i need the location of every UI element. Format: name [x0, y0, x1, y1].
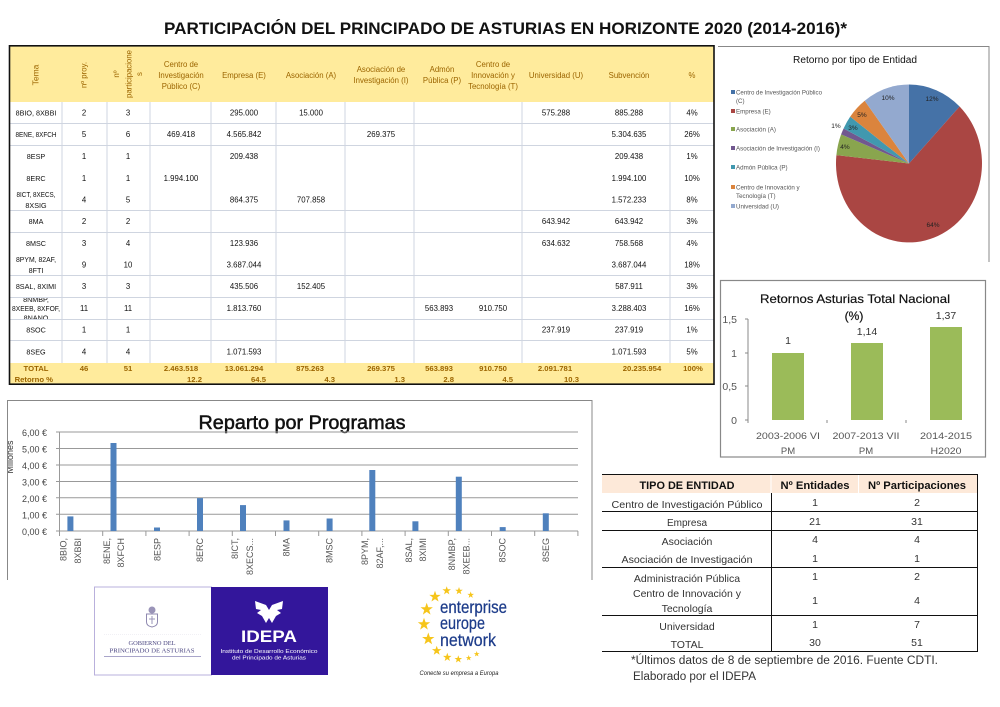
- table body rows: 1.071.593: [227, 348, 261, 356]
- table body rows: 8XEEB, 8XFOF,: [12, 304, 60, 313]
- table body rows: 8ESP: [27, 152, 45, 161]
- table header row: Tecnología (T): [468, 82, 518, 91]
- programme chart category labels: 8ERC: [195, 538, 205, 562]
- table header row: s: [135, 72, 144, 76]
- entity table rows: 1: [812, 619, 818, 631]
- table return percentage row: 1.3: [394, 375, 405, 384]
- table body rows: 1: [82, 326, 86, 334]
- table body rows: 11: [124, 304, 132, 313]
- logo: Gobierno del Principado de Asturias: [94, 587, 212, 675]
- programme chart axis labels: 4,00 €: [22, 461, 47, 471]
- table body rows: 10%: [684, 174, 700, 183]
- table body rows: 8SAL, 8XIMI: [16, 282, 56, 291]
- table body rows: 5: [126, 196, 131, 204]
- table body rows: 864.375: [230, 196, 259, 204]
- table body rows: 4: [126, 239, 131, 248]
- table header row: nº: [112, 70, 121, 78]
- table header row: Investigación: [158, 71, 204, 80]
- table body rows: 4.565.842: [227, 130, 261, 139]
- table header row: nº proy.: [80, 62, 88, 88]
- table total row: 2.091.781: [538, 364, 573, 373]
- entity table rows: Universidad: [659, 621, 715, 633]
- table header row: Innovación y: [471, 71, 515, 80]
- return chart categories: 2007-2013 VII: [832, 431, 900, 442]
- table header row: Centro de: [476, 60, 510, 69]
- table body rows: 1%: [686, 152, 698, 161]
- programme chart category labels: 8XEEB...: [462, 538, 472, 575]
- return chart axis labels: 0: [731, 415, 737, 427]
- programme chart category labels: 8XIMI: [418, 538, 428, 562]
- programme chart category labels: 8BIO,: [58, 538, 68, 561]
- return chart categories: 2014-2015: [920, 431, 972, 442]
- entity table rows: 1: [914, 553, 920, 565]
- table body rows: 8ICT, 8XECS,: [16, 190, 56, 199]
- pie chart legend: Asociación (A): [736, 126, 776, 134]
- table header row: Asociación (A): [286, 71, 337, 80]
- table body rows: 8BIO, 8XBBI: [16, 108, 56, 118]
- entity table rows: 31: [911, 516, 923, 528]
- return chart heading: (%): [845, 309, 863, 323]
- programme chart heading: Reparto por Programas: [198, 413, 406, 434]
- table body rows: 3: [126, 108, 130, 118]
- entity table rows: 1: [812, 571, 818, 583]
- government name: PRINCIPADO DE ASTURIAS: [110, 648, 195, 654]
- table return percentage row: 64.5: [251, 375, 267, 384]
- panel: distribution by programme bar chart: [5, 400, 592, 580]
- table body rows: 563.893: [425, 304, 453, 313]
- table total row: 100%: [683, 364, 703, 373]
- entity table rows: 21: [809, 516, 821, 528]
- table body rows: 3: [82, 282, 86, 291]
- table body rows: 8XSIG: [25, 201, 47, 210]
- panel: national return bar chart: [720, 280, 986, 457]
- pie chart percentage labels: 5%: [857, 112, 867, 119]
- panel: pie chart return by entity type: [718, 46, 989, 262]
- return chart heading: Retornos Asturias Total Nacional: [760, 292, 950, 306]
- table body rows: 123.936: [230, 239, 258, 248]
- return chart categories: PM: [859, 446, 873, 457]
- return chart categories: [756, 431, 972, 457]
- table body rows: 643.942: [542, 217, 570, 226]
- return chart values: [785, 310, 956, 347]
- table header row: Pública (P): [423, 76, 461, 85]
- table body rows: 269.375: [367, 130, 396, 139]
- pie chart legend: Asociación de Investigación (I): [736, 146, 820, 152]
- table body rows: 8SOC: [26, 326, 46, 334]
- logo: IDEPA: [211, 587, 328, 675]
- table body rows: 4: [82, 196, 87, 204]
- table body rows: 237.919: [615, 326, 643, 334]
- return chart categories: PM: [781, 446, 795, 457]
- table body rows: 3: [82, 239, 86, 248]
- government name: [110, 640, 195, 654]
- pie chart legend: Universidad (U): [736, 204, 779, 210]
- pie chart legend: Admón Pública (P): [736, 164, 788, 172]
- footnote: *Últimos datos de 8 de septiembre de 2016. Fuente CDTI.: [631, 654, 938, 667]
- return chart axis labels: 0,5: [722, 381, 737, 393]
- table body rows: 3.687.044: [612, 260, 647, 270]
- table total row: 563.893: [425, 364, 453, 373]
- table body rows: 209.438: [230, 152, 258, 161]
- table body rows: 1.071.593: [612, 348, 646, 356]
- pie chart percentage labels: 12%: [925, 96, 939, 103]
- entity table rows: Tecnología: [662, 603, 713, 615]
- programme chart category labels: 8NMBP,: [447, 538, 457, 570]
- table body rows: 5: [82, 130, 87, 139]
- table body rows: 4%: [686, 108, 698, 118]
- entity table rows: 2: [914, 571, 920, 583]
- programme chart axis labels: 6,00 €: [22, 428, 47, 438]
- table body rows: 8SEG: [26, 348, 46, 356]
- entity table header: TIPO DE ENTIDAD: [640, 480, 735, 492]
- programme chart axis labels: 5,00 €: [22, 444, 47, 454]
- table body rows: 1: [126, 174, 130, 183]
- pie chart percentage labels: 4%: [840, 144, 850, 151]
- table body rows: 237.919: [542, 326, 570, 334]
- pie chart legend: Centro de Innovación y: [736, 184, 801, 192]
- programme chart category labels: 8SEG: [541, 538, 551, 562]
- table body rows: 1.572.233: [612, 196, 646, 204]
- programme chart category labels: 8SAL,: [404, 538, 414, 563]
- table body rows: 1.994.100: [612, 174, 647, 183]
- entity table header: Nº Participaciones: [868, 480, 966, 492]
- logo: enterprise europe network: [418, 586, 507, 677]
- icon: IDEPA bird symbol: [255, 601, 283, 623]
- network wordmark: enterprise: [440, 597, 507, 617]
- entity table rows: 4: [914, 534, 920, 546]
- network wordmark: [440, 597, 507, 650]
- programme chart category labels: 8MA: [282, 538, 292, 557]
- table total row: TOTAL: [24, 364, 49, 373]
- table body rows: 16%: [684, 304, 700, 313]
- table body rows: 11: [80, 304, 88, 313]
- programme chart axis labels: 0,00 €: [22, 527, 47, 537]
- return chart axis labels: [722, 314, 737, 427]
- footnote: [631, 654, 938, 683]
- table header row: Universidad (U): [529, 71, 583, 80]
- table body rows: 5.304.635: [612, 130, 647, 139]
- pie chart percentage labels: 64%: [926, 222, 940, 229]
- table header row: Asociación de: [357, 65, 405, 74]
- table body rows: 1: [82, 152, 86, 161]
- title: PARTICIPACIÓN DEL PRINCIPADO DE ASTURIAS EN HORIZONTE 2020 (2014-2016)*: [164, 19, 847, 38]
- table body rows: 8ERC: [26, 174, 46, 183]
- table total row: [24, 364, 703, 373]
- table body rows: 587.911: [615, 282, 643, 291]
- table body rows: 707.858: [297, 196, 325, 204]
- table body rows: 15.000: [299, 108, 324, 118]
- table total row: 13.061.294: [225, 364, 264, 373]
- table body rows: 758.568: [615, 239, 643, 248]
- table total row: 910.750: [479, 364, 507, 373]
- return chart heading: [760, 292, 950, 323]
- table body rows: 8NMBP,: [23, 295, 49, 304]
- table body rows: 8PYM, 82AF,: [16, 255, 56, 264]
- table body rows: 3: [126, 282, 130, 291]
- table body rows: 8MSC: [26, 239, 46, 248]
- table return percentage row: 2.8: [443, 375, 455, 384]
- table body rows: 26%: [684, 130, 700, 139]
- entity table rows: Asociación: [662, 536, 713, 548]
- return chart categories: H2020: [930, 446, 962, 457]
- table total row: 269.375: [367, 364, 396, 373]
- programme chart category labels: 8SOC: [498, 538, 508, 563]
- table header row: Investigación (I): [353, 76, 409, 85]
- table return percentage row: 12.2: [187, 375, 202, 384]
- panel: entity type table: [602, 474, 978, 652]
- table header row: Público (C): [162, 82, 201, 91]
- programme chart axis labels: 3,00 €: [22, 478, 47, 488]
- entity table rows: Empresa: [667, 518, 707, 529]
- footnote: Elaborado por el IDEPA: [633, 671, 756, 683]
- entity table header: Nº Entidades: [780, 480, 850, 492]
- programme chart category labels: 8PYM,: [360, 538, 370, 565]
- table body rows: 18%: [684, 260, 700, 270]
- table body rows: 8NANO: [24, 314, 49, 322]
- table header row: %: [689, 71, 696, 80]
- entity table rows: 1: [812, 595, 818, 607]
- programme chart category labels: 8XFCH: [116, 538, 126, 568]
- pie chart percentage labels: 1%: [831, 123, 841, 130]
- table body rows: 10: [124, 260, 133, 270]
- network wordmark: europe: [440, 613, 485, 633]
- table body rows: [12, 108, 700, 356]
- table header row: Admón: [430, 65, 454, 74]
- pie chart percentage labels: [831, 95, 940, 229]
- table body rows: 4%: [686, 239, 698, 248]
- pie chart heading: Retorno por tipo de Entidad: [793, 55, 917, 66]
- entity table rows: [612, 497, 923, 651]
- programme chart category labels: 8ICT,: [230, 538, 240, 559]
- pie chart slices: [836, 84, 982, 242]
- network wordmark: network: [440, 630, 496, 650]
- return chart axis labels: 1,5: [722, 314, 737, 326]
- table body rows: 643.942: [615, 217, 643, 226]
- table return percentage row: 10.3: [564, 375, 579, 384]
- table body rows: 8%: [686, 196, 698, 204]
- entity table rows: 1: [812, 497, 818, 509]
- table body rows: 435.506: [230, 282, 258, 291]
- table total row: 46: [80, 364, 88, 373]
- return chart axis labels: 1: [731, 348, 737, 360]
- table body rows: 3.687.044: [227, 260, 262, 270]
- table body rows: 9: [82, 260, 86, 270]
- table body rows: 1.994.100: [164, 174, 199, 183]
- table body rows: 3%: [686, 282, 698, 291]
- table body rows: 4: [126, 348, 131, 356]
- programme chart category labels: 8MSC: [325, 538, 335, 563]
- table return percentage row: 4.3: [324, 375, 335, 384]
- entity table rows: Administración Pública: [634, 573, 740, 585]
- table return percentage row: 4.5: [502, 375, 514, 384]
- table total row: 51: [124, 364, 133, 373]
- table body rows: 1: [82, 174, 86, 183]
- entity table rows: 4: [914, 595, 920, 607]
- return chart bars: [772, 327, 962, 420]
- table body rows: 1: [126, 152, 130, 161]
- table body rows: 910.750: [479, 304, 508, 313]
- panel: main participation table: [9, 46, 714, 384]
- table body rows: 2: [82, 108, 86, 118]
- table body rows: 2: [82, 217, 86, 226]
- table body rows: 295.000: [230, 108, 259, 118]
- pie chart legend: Tecnología (T): [736, 193, 776, 200]
- table header row: Subvención: [609, 71, 649, 80]
- table return percentage row: Retorno %: [15, 375, 53, 384]
- entity table rows: 4: [812, 534, 818, 546]
- entity table rows: 1: [812, 553, 818, 565]
- programme chart category labels: 8ENE,: [102, 538, 112, 564]
- entity table rows: TOTAL: [671, 639, 704, 651]
- table total row: 875.263: [296, 364, 324, 373]
- return chart values: 1,14: [857, 326, 877, 338]
- IDEPA full name: [220, 649, 318, 662]
- programme chart axis title: Millones: [5, 440, 15, 474]
- return chart values: 1,37: [936, 310, 956, 322]
- table body rows: 634.632: [542, 239, 570, 248]
- programme chart bars: [67, 443, 549, 531]
- table return percentage row: [15, 375, 579, 384]
- table body rows: 8MA: [29, 217, 44, 226]
- entity table header: [640, 480, 966, 492]
- table body rows: 209.438: [615, 152, 643, 161]
- table header row: Centro de: [164, 60, 198, 69]
- table body rows: 469.418: [167, 130, 195, 139]
- programme chart axis labels: [22, 428, 47, 537]
- table body rows: 152.405: [297, 282, 326, 291]
- entity table rows: Centro de Investigación Público: [612, 499, 763, 511]
- pie chart percentage labels: 10%: [881, 95, 895, 102]
- pie chart legend: Centro de Investigación Público: [736, 90, 823, 96]
- table body rows: 3.288.403: [612, 304, 646, 313]
- icon: coat of arms: [146, 606, 158, 627]
- table body rows: 575.288: [542, 108, 570, 118]
- IDEPA wordmark: IDEPA: [241, 627, 297, 646]
- table body rows: 1.813.760: [227, 304, 262, 313]
- entity table rows: 2: [914, 497, 920, 509]
- table body rows: 4: [82, 348, 87, 356]
- IDEPA full name: del Principado de Asturias: [232, 656, 306, 662]
- icon: ring of stars: [418, 586, 480, 663]
- table body rows: 3%: [686, 217, 698, 226]
- programme chart category labels: [58, 538, 551, 575]
- pie chart legend: (C): [736, 98, 745, 105]
- IDEPA full name: Instituto de Desarrollo Económico: [220, 649, 318, 655]
- programme chart category labels: 8XBBI: [73, 538, 83, 564]
- programme chart axis labels: 2,00 €: [22, 494, 47, 504]
- table body rows: 2: [126, 217, 130, 226]
- programme chart category labels: 8XECS...: [245, 538, 255, 575]
- entity table rows: 7: [914, 619, 920, 631]
- entity table rows: Asociación de Investigación: [622, 554, 753, 566]
- entity table rows: Centro de Innovación y: [633, 588, 742, 600]
- pie chart percentage labels: 3%: [848, 125, 858, 132]
- table body rows: 8FTI: [29, 266, 43, 275]
- table body rows: 5%: [686, 348, 698, 356]
- pie chart legend: [731, 90, 823, 210]
- table total row: 2.463.518: [164, 364, 199, 373]
- table header row: Empresa (E): [222, 71, 266, 80]
- table body rows: 1%: [686, 326, 698, 334]
- pie chart legend: Empresa (E): [736, 108, 771, 116]
- entity table rows: 51: [911, 637, 923, 649]
- programme chart category labels: 8ESP: [153, 538, 163, 561]
- table header row: [30, 50, 696, 98]
- programme chart axis labels: 1,00 €: [22, 510, 47, 520]
- table body rows: 885.288: [615, 108, 643, 118]
- return chart categories: 2003-2006 VI: [756, 431, 820, 442]
- table header row: Tema: [30, 64, 40, 85]
- table body rows: 6: [126, 130, 130, 139]
- table body rows: 1: [126, 326, 130, 334]
- network tagline: Conecte su empresa a Europa: [420, 671, 499, 677]
- return chart values: 1: [785, 335, 791, 347]
- table body rows: 8ENE, 8XFCH: [16, 130, 56, 139]
- table header row: participacione: [124, 50, 134, 98]
- programme chart category labels: 82AF,...: [375, 538, 385, 569]
- government name: GOBIERNO DEL: [128, 640, 176, 647]
- entity table rows: 30: [809, 637, 821, 649]
- table total row: 20.235.954: [623, 364, 662, 373]
